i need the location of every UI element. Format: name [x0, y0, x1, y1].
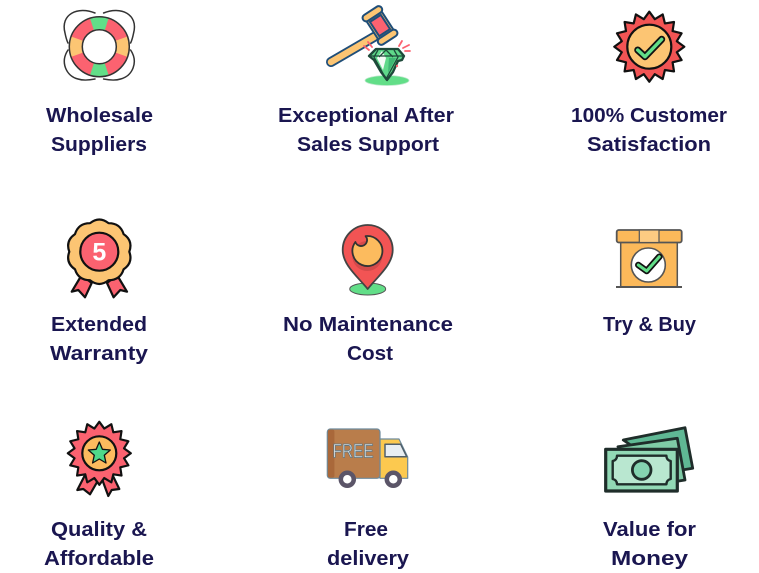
panel: try and buy: [603, 230, 697, 336]
icon: box with check: [616, 230, 682, 287]
icon: delivery truck: [327, 429, 408, 486]
label: value for money: [603, 519, 696, 570]
label: exceptional after sales support: Exceptional After: [278, 105, 454, 127]
panel: wholesale suppliers: [46, 10, 153, 156]
label: quality and affordable: Affordable: [44, 548, 154, 570]
panel: extended warranty: [50, 219, 149, 365]
label: customer satisfaction: Satisfaction: [587, 134, 711, 156]
icon: delivery truck: FREE: [332, 442, 374, 462]
label: customer satisfaction: 100% Customer: [571, 105, 727, 127]
icon: five-year medal: [68, 219, 130, 297]
label: exceptional after sales support: Sales Support: [297, 134, 439, 156]
label: free delivery: [327, 519, 410, 570]
label: value for money: Money: [611, 548, 689, 570]
label: try and buy: Try & Buy: [603, 314, 697, 336]
icon: check badge: [614, 12, 684, 82]
label: no maintenance cost: [283, 314, 453, 365]
label: free delivery: delivery: [327, 548, 410, 570]
icon: five-year medal: 5: [92, 239, 106, 267]
panel: no maintenance cost: [283, 225, 453, 365]
icon: banknotes: [606, 428, 693, 491]
label: customer satisfaction: [571, 105, 727, 156]
label: no maintenance cost: No Maintenance: [283, 314, 453, 336]
label: exceptional after sales support: [278, 105, 454, 156]
panel: free delivery: [327, 429, 410, 570]
label: wholesale suppliers: Wholesale: [46, 105, 153, 127]
label: extended warranty: Warranty: [50, 343, 149, 365]
icon: gavel and diamond: [331, 5, 410, 85]
label: free delivery: Free: [344, 519, 388, 541]
label: extended warranty: Extended: [51, 314, 147, 336]
icon: lifebuoy: [64, 10, 134, 80]
panel: after sales support: [278, 5, 454, 156]
label: value for money: Value for: [603, 519, 696, 541]
label: no maintenance cost: Cost: [347, 343, 393, 365]
panel: quality and affordable: [44, 422, 154, 570]
icon: map pin: [343, 225, 393, 295]
label: extended warranty: [50, 314, 149, 365]
label: quality and affordable: [44, 519, 154, 570]
icon: star rosette: [68, 422, 131, 496]
label: quality and affordable: Quality &: [51, 519, 147, 541]
panel: customer satisfaction: [571, 12, 727, 156]
label: wholesale suppliers: Suppliers: [51, 134, 147, 156]
label: wholesale suppliers: [46, 105, 153, 156]
panel: value for money: [606, 428, 693, 491]
